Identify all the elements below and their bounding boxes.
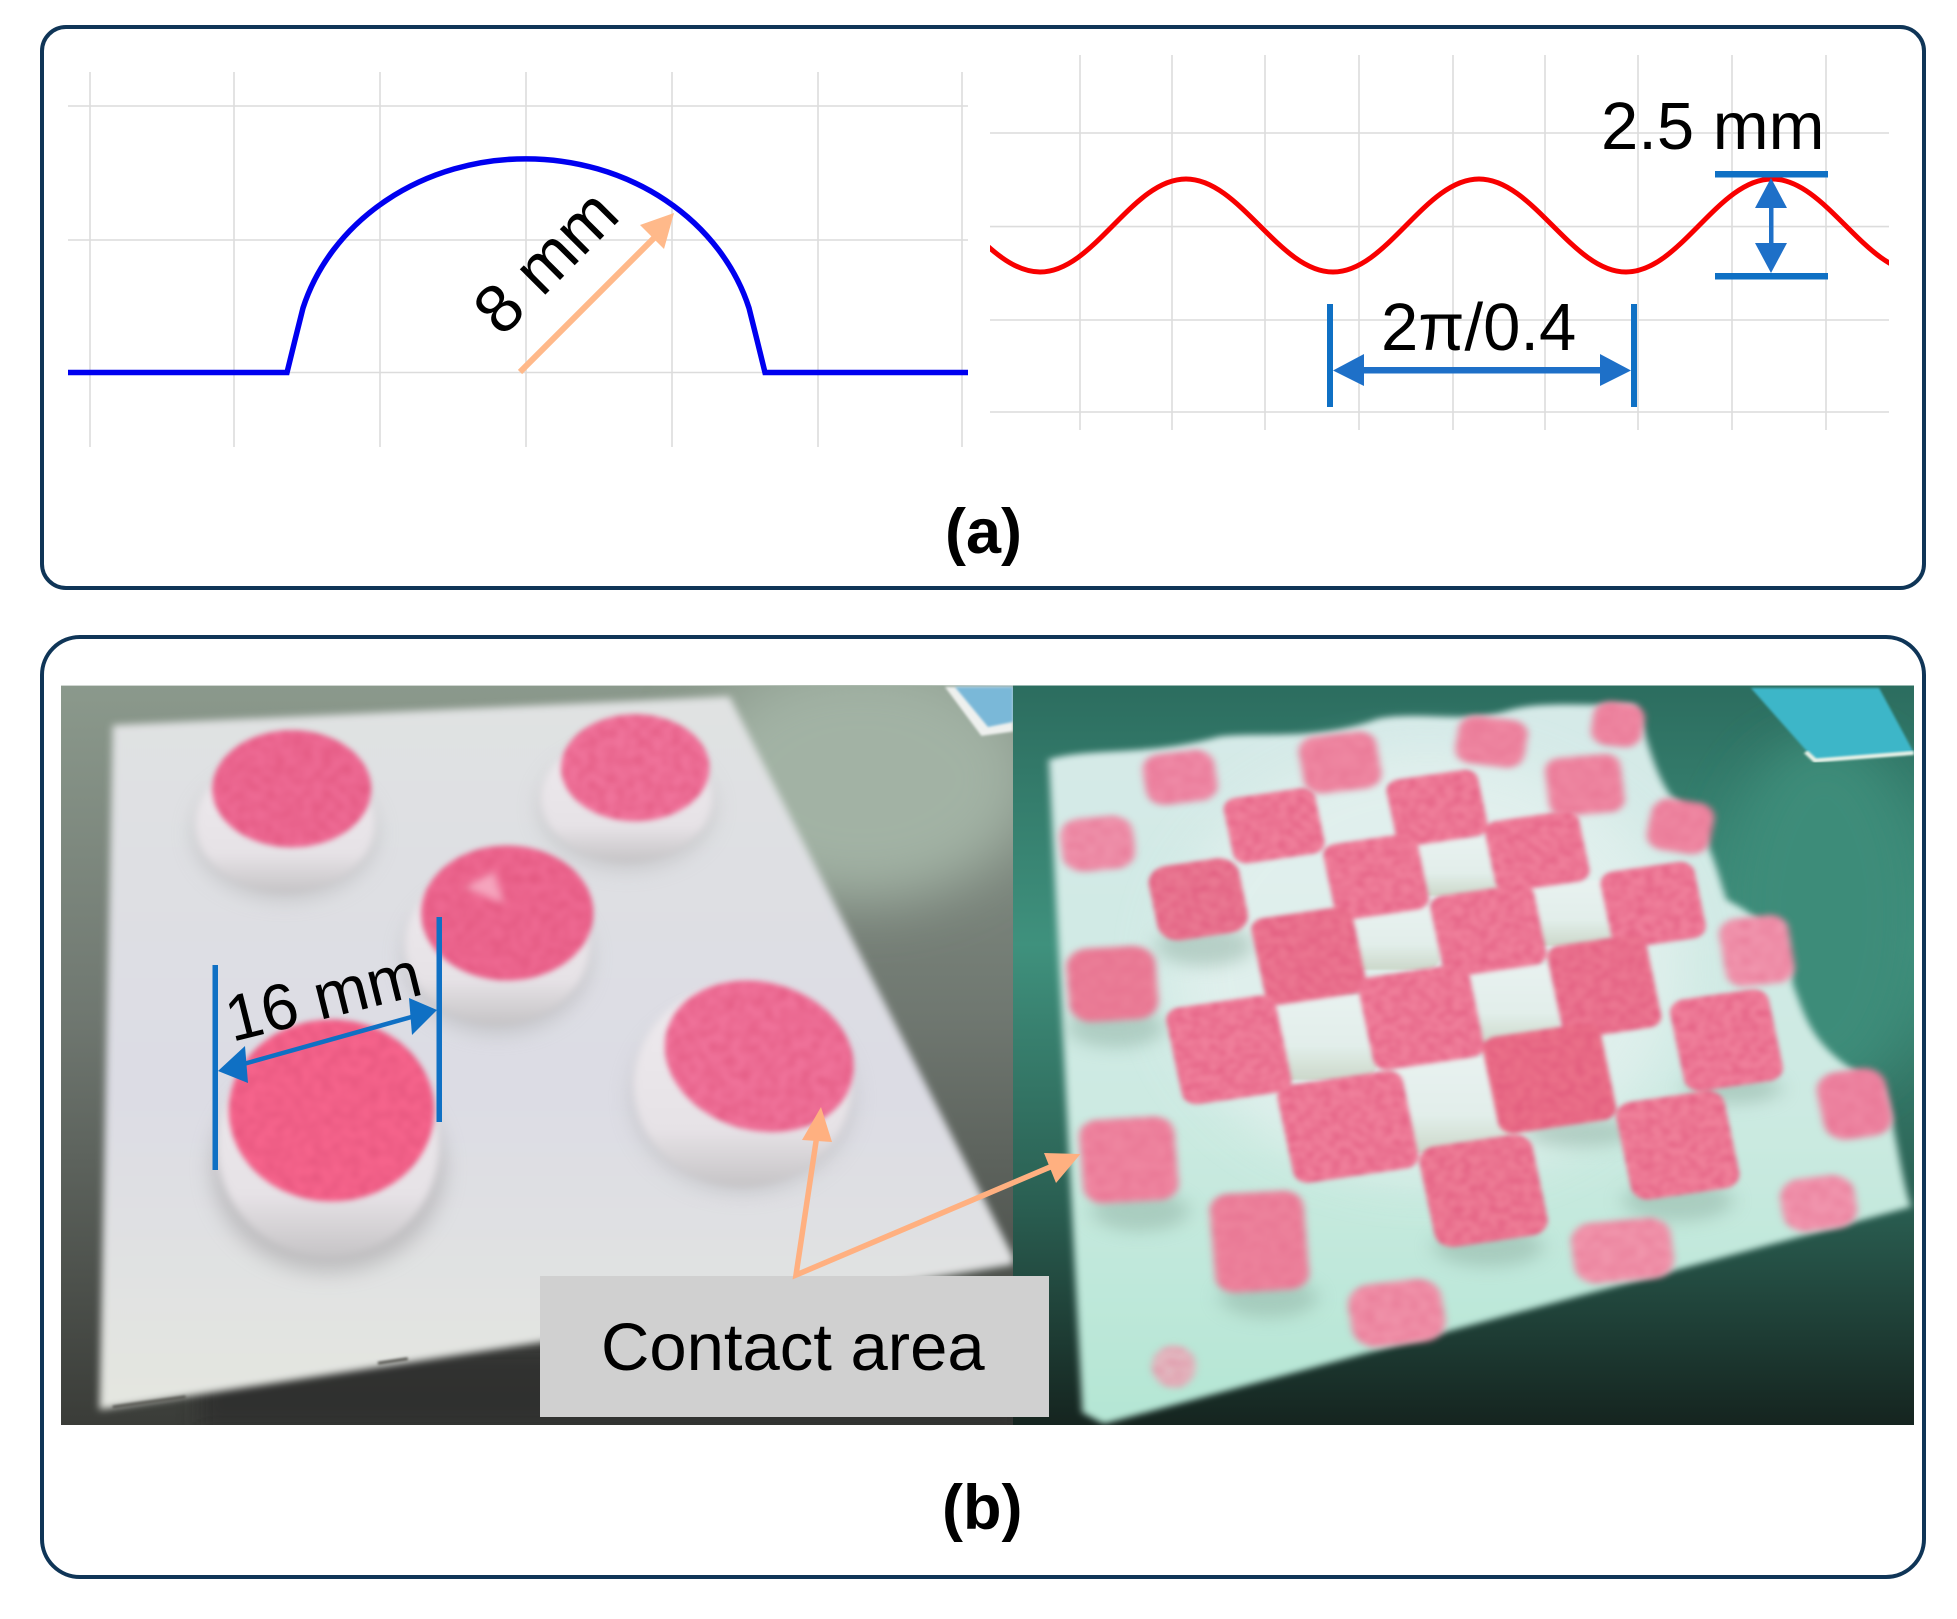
pink central contact patches xyxy=(1145,768,1785,1249)
label: 16 mm: 16 mm xyxy=(218,937,428,1056)
chart: dome profile xyxy=(68,72,968,447)
photo: hemispherical dome plate xyxy=(61,658,1034,1429)
panel a xyxy=(42,27,1924,588)
caption a: (a) xyxy=(945,497,1022,567)
caption b: (b) xyxy=(942,1473,1022,1543)
arrow: radius xyxy=(520,213,674,372)
callout: contact area: Contact area xyxy=(601,1310,985,1385)
red sine curve xyxy=(893,179,1919,272)
panel b frame xyxy=(42,637,1924,1577)
chart: sine profile xyxy=(990,55,1889,430)
callout: contact area xyxy=(540,1276,1049,1417)
checker shadows xyxy=(1067,925,1781,1318)
dimension: 16 mm xyxy=(212,917,442,1170)
dome: front left xyxy=(212,1019,444,1273)
pink outer contact patches xyxy=(1058,700,1896,1388)
blue card xyxy=(1751,688,1914,761)
label: 2π/0.4: 2π/0.4 xyxy=(1381,290,1576,365)
light recesses xyxy=(1278,877,1612,1153)
dome: middle xyxy=(404,845,593,1034)
foam mat xyxy=(1049,705,1911,1424)
blue dome curve xyxy=(68,159,968,372)
photo: sinusoidal checker mat xyxy=(1012,686,1928,1425)
dome: back left xyxy=(194,730,377,900)
dimension: period xyxy=(1327,304,1637,407)
arrows: contact area pointers xyxy=(796,1107,1080,1275)
dome: right xyxy=(628,976,858,1196)
dome: back right xyxy=(539,714,714,870)
label: 8 mm: 8 mm xyxy=(459,175,633,349)
dimension: amplitude xyxy=(1715,171,1828,280)
panel b xyxy=(42,637,1928,1577)
panel a frame xyxy=(42,27,1924,588)
label: 2.5 mm: 2.5 mm xyxy=(1601,89,1824,164)
